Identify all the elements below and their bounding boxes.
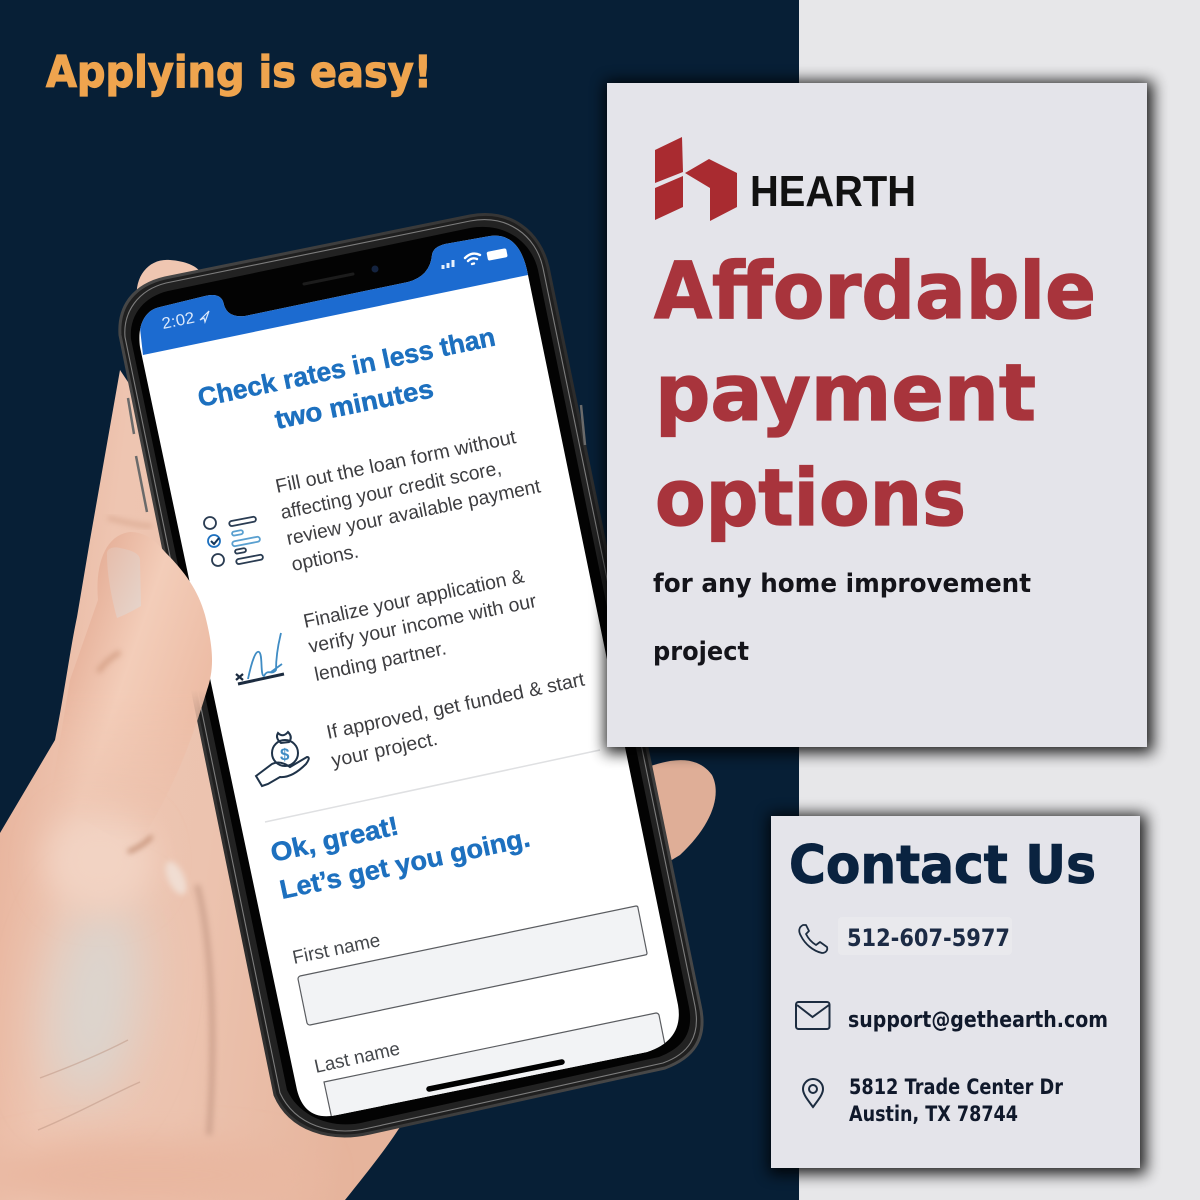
home indicator — [429, 1062, 562, 1089]
step 2 text: verify your income with our — [307, 590, 539, 658]
speaker — [304, 274, 353, 284]
input: first name — [298, 906, 647, 1025]
phone inner black bezel — [131, 227, 690, 1124]
palm fold near the phone — [197, 885, 212, 1135]
input: last name — [323, 1012, 666, 1116]
step 2 text — [302, 565, 539, 686]
logo mark — [655, 137, 737, 221]
battery — [486, 248, 508, 261]
contact heading: Contact Us — [789, 835, 1096, 896]
phone — [120, 170, 702, 1180]
logo wordmark: HEARTH — [750, 167, 916, 216]
label: first name: First name — [291, 930, 382, 969]
email: support@gethearth.com — [848, 1008, 1108, 1033]
background: light panel — [799, 0, 1200, 1200]
phone metal highlight — [125, 220, 696, 1131]
palm tones — [8, 814, 231, 1200]
divider line — [265, 750, 600, 822]
step 1 text: affecting your credit score, — [279, 457, 503, 524]
location arrow — [200, 311, 209, 322]
icon: money bag in hand: $ — [280, 745, 290, 764]
phone highlight — [838, 917, 1012, 955]
subheading: for any home improvement — [653, 569, 1031, 599]
finger crease — [108, 518, 152, 526]
step 3 text: If approved, get funded & start — [325, 668, 587, 744]
headline: payment — [655, 349, 1036, 439]
icon: checklist — [204, 516, 263, 566]
thumb nail — [107, 547, 141, 618]
camera — [372, 266, 378, 272]
headline: Affordable — [654, 247, 1096, 337]
palm highlight — [36, 890, 154, 1110]
address — [849, 1075, 1063, 1127]
illustration: hand behind phone — [0, 260, 716, 1200]
icon: signature — [236, 633, 284, 684]
background: dark navy panel — [0, 0, 799, 1200]
upper hand highlight — [45, 810, 155, 910]
wifi — [465, 254, 480, 264]
label: last name: Last name — [313, 1039, 402, 1078]
step 2 text: Finalize your application & — [302, 565, 526, 633]
icon: phone — [799, 925, 827, 953]
headline: options — [655, 454, 966, 544]
icon: money bag in hand — [256, 732, 309, 786]
panel: main card — [605, 81, 1153, 753]
card background — [771, 816, 1140, 1168]
heading: applying is easy: Applying is easy! — [46, 47, 432, 98]
screen heading: Check rates in less than — [195, 322, 498, 413]
subheading: project — [653, 637, 749, 667]
step 1 text: Fill out the loan form without — [274, 426, 518, 498]
creases — [38, 1040, 140, 1130]
address: 5812 Trade Center Dr — [849, 1075, 1063, 1100]
icon: location pin — [803, 1079, 823, 1107]
phone number: 512-607-5977 — [847, 924, 1010, 952]
side buttons — [128, 398, 585, 512]
icon: envelope — [796, 1002, 830, 1029]
thumb over the phone — [66, 516, 212, 721]
screen heading: two minutes — [272, 373, 436, 435]
headline — [654, 247, 1096, 544]
thumb knuckle shade — [98, 652, 120, 672]
fingertip at the top of the phone — [137, 260, 200, 300]
address: Austin, TX 78744 — [849, 1102, 1018, 1127]
card shadow — [605, 81, 1153, 753]
subheading — [653, 569, 1031, 667]
panel: contact card — [769, 814, 1146, 1174]
form heading: Ok, great! — [268, 810, 401, 868]
blue status bar — [140, 236, 528, 355]
step 1 text: review your available payment — [285, 475, 543, 550]
step 3 text: your project. — [329, 728, 440, 772]
right fingertip — [640, 760, 716, 870]
card shadow — [769, 814, 1146, 1174]
form heading: Let’s get you going. — [277, 823, 533, 905]
step 2 text: lending partner. — [313, 637, 448, 686]
signal bars — [443, 260, 453, 269]
thumb base fold — [128, 836, 152, 852]
wrist warm tone — [8, 1140, 231, 1200]
card background — [607, 83, 1147, 747]
step 1 text — [274, 426, 543, 576]
status time: 2:02 — [160, 310, 196, 333]
step 1 text: options. — [290, 540, 361, 576]
thumb shape — [66, 532, 212, 721]
screen — [139, 236, 679, 1116]
phone body outer frame — [120, 214, 702, 1136]
fold highlight — [164, 860, 188, 896]
hand and wrist — [0, 370, 420, 1200]
